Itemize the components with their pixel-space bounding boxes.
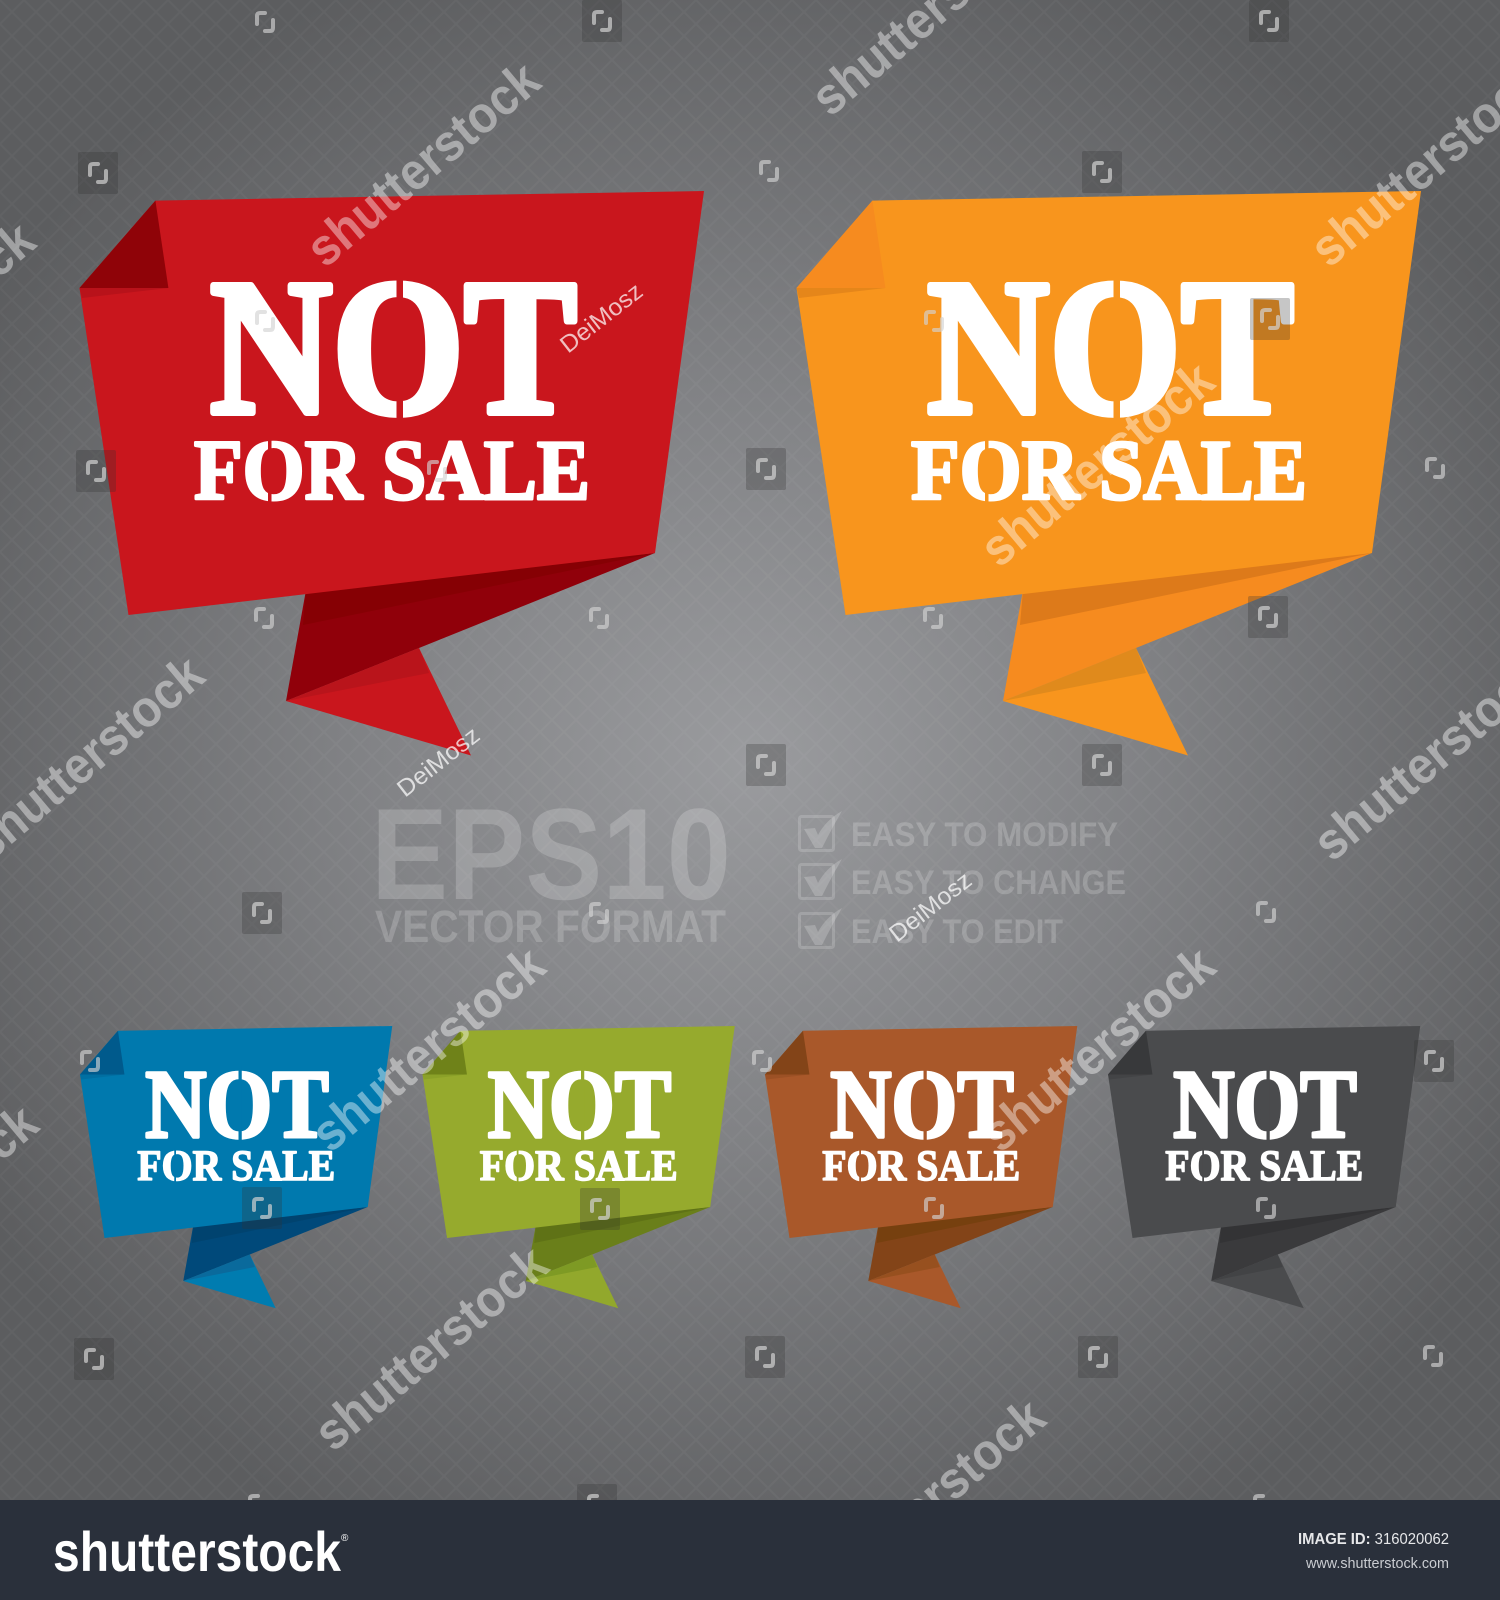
heading: NOT: NOT bbox=[145, 1051, 329, 1158]
main panel bbox=[765, 1026, 1077, 1238]
shutterstock watermarks: shutterstock bbox=[970, 936, 1226, 1163]
heading: FOR SALE: FOR SALE bbox=[194, 422, 590, 518]
shutterstock watermarks: shutterstock bbox=[295, 51, 551, 278]
footer logo: shutterstock: shutterstock bbox=[53, 1520, 342, 1583]
banner: blue small bbox=[80, 1026, 392, 1308]
shutterstock watermarks: shutterstock bbox=[303, 1235, 559, 1462]
heading: NOT: NOT bbox=[210, 240, 577, 454]
lower fold band bbox=[1003, 553, 1372, 701]
heading: NOT: NOT bbox=[1173, 1051, 1357, 1158]
heading: NOT: NOT bbox=[488, 1051, 671, 1158]
text: EASY TO CHANGE: EASY TO CHANGE bbox=[851, 864, 1126, 902]
checkbox icon 2 bbox=[800, 859, 842, 898]
tail bbox=[183, 1254, 276, 1308]
lower fold band bbox=[183, 1207, 368, 1281]
text: EASY TO MODIFY: EASY TO MODIFY bbox=[851, 816, 1118, 854]
heading: NOT: NOT bbox=[927, 240, 1294, 454]
checkbox icon 1 bbox=[800, 811, 842, 850]
text: EASY TO EDIT: EASY TO EDIT bbox=[851, 913, 1063, 951]
footer background bbox=[0, 1500, 1500, 1600]
corner fold bbox=[765, 1031, 809, 1080]
footer bar bbox=[0, 1500, 1500, 1600]
main panel bbox=[422, 1026, 735, 1238]
shutterstock watermarks: shutterstock bbox=[969, 351, 1225, 578]
DeiMosz contributor marks: DeiMosz bbox=[392, 722, 485, 803]
heading: EPS10: EPS10 bbox=[371, 781, 731, 927]
corner fold bbox=[796, 201, 885, 298]
banner: green small bbox=[422, 1026, 735, 1308]
banner: red large bbox=[80, 191, 704, 756]
feature checklist bbox=[800, 811, 1126, 951]
footer registered mark: ® bbox=[341, 1533, 349, 1544]
DeiMosz contributor marks bbox=[392, 278, 977, 948]
corner fold bbox=[80, 1031, 124, 1080]
heading: FOR SALE: FOR SALE bbox=[822, 1143, 1020, 1190]
corner fold bbox=[422, 1031, 467, 1080]
shutterstock watermarks: shutterstock bbox=[300, 936, 556, 1163]
tail bbox=[526, 1254, 618, 1308]
corner fold bbox=[1108, 1031, 1152, 1080]
main panel bbox=[796, 191, 1421, 615]
tail bbox=[1003, 648, 1188, 756]
subheading: VECTOR FORMAT: VECTOR FORMAT bbox=[375, 901, 726, 952]
heading: NOT: NOT bbox=[830, 1051, 1014, 1158]
tail bbox=[868, 1254, 961, 1308]
lower fold band bbox=[526, 1207, 710, 1281]
heading: FOR SALE: FOR SALE bbox=[911, 422, 1307, 518]
lower fold band bbox=[286, 553, 655, 701]
main panel bbox=[1108, 1026, 1420, 1238]
checkbox icon 3 bbox=[800, 908, 842, 948]
tail bbox=[1211, 1254, 1304, 1308]
main panel bbox=[80, 1026, 392, 1238]
banner: dark grey small bbox=[1108, 1026, 1420, 1308]
main panel bbox=[80, 191, 704, 615]
heading: FOR SALE: FOR SALE bbox=[480, 1143, 678, 1190]
corner fold bbox=[80, 201, 168, 298]
EPS10 vector format block bbox=[371, 781, 731, 952]
lower fold band bbox=[1211, 1207, 1396, 1281]
banner: orange large bbox=[796, 191, 1421, 756]
footer website: www.shutterstock.com bbox=[1305, 1556, 1449, 1572]
heading: FOR SALE: FOR SALE bbox=[137, 1143, 335, 1190]
DeiMosz contributor marks: DeiMosz bbox=[555, 278, 648, 359]
tail bbox=[286, 648, 471, 756]
DeiMosz contributor marks: DeiMosz bbox=[884, 867, 977, 948]
lower fold band bbox=[868, 1207, 1053, 1281]
heading: FOR SALE: FOR SALE bbox=[1165, 1143, 1363, 1190]
banner: brown small bbox=[765, 1026, 1077, 1308]
footer image id: IMAGE ID: 316020062 bbox=[1298, 1531, 1449, 1548]
